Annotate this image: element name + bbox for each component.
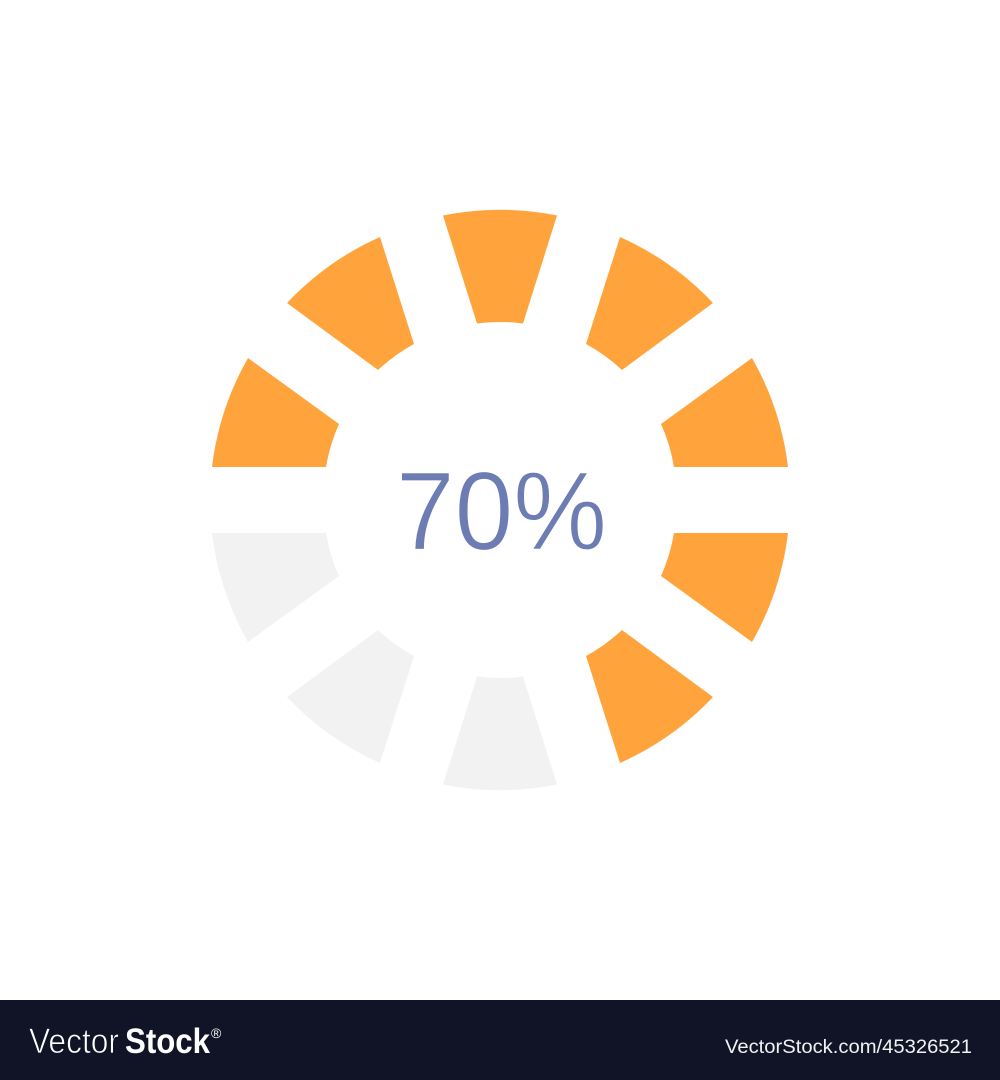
percentage label: 70% bbox=[396, 450, 607, 574]
segment 8: empty bbox=[212, 533, 339, 642]
footer logo: ® bbox=[211, 1025, 222, 1041]
segment 3: filled bbox=[661, 358, 788, 467]
footer url: VectorStock.com/45326521 bbox=[725, 1037, 972, 1058]
segment 10: filled bbox=[287, 237, 414, 370]
segment 2: filled bbox=[586, 237, 713, 370]
segment 5: filled bbox=[586, 630, 713, 763]
radial progress chart bbox=[212, 210, 788, 790]
segment 1: filled bbox=[443, 210, 557, 324]
segment 7: empty bbox=[287, 630, 414, 763]
footer logo bbox=[29, 1022, 222, 1061]
segment 9: filled bbox=[212, 358, 339, 467]
footer bar bbox=[0, 1000, 1000, 1080]
segment 6: empty bbox=[443, 676, 557, 790]
footer logo: Stock bbox=[125, 1022, 210, 1061]
footer logo: Vector bbox=[29, 1022, 119, 1061]
segment 4: filled bbox=[661, 533, 788, 642]
